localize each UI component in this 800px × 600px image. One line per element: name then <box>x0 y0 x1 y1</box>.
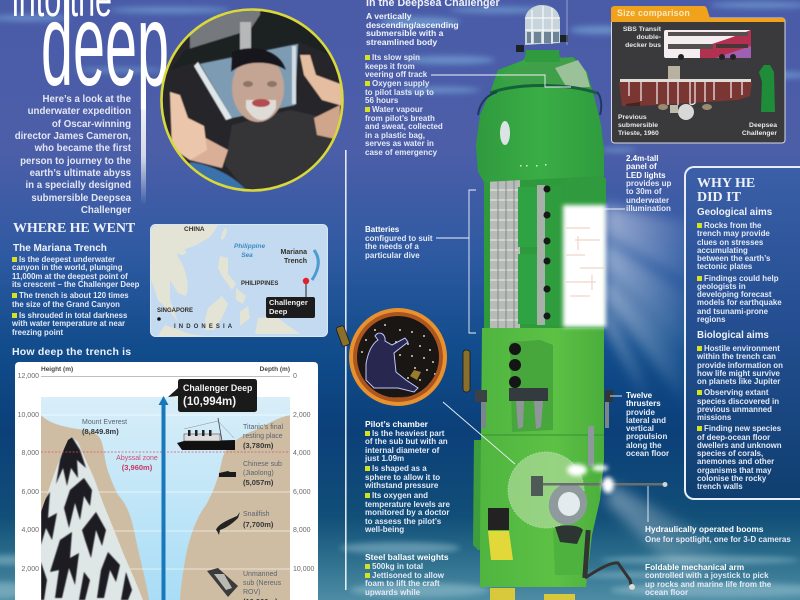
text: biological aims: species discovered in <box>697 396 779 406</box>
map label: Philippine Sea <box>234 243 265 258</box>
text: batteries: particular dive <box>365 250 420 260</box>
text: steel ballast weights <box>365 552 449 597</box>
label: Mount Everest: Mount Everest <box>82 419 127 426</box>
text: biological aims: of deep-ocean floor <box>697 432 770 442</box>
callout: Challenger Deep 10,994m: Challenger Deep <box>183 383 252 393</box>
bus icon <box>664 30 751 60</box>
text: pilot's chamber: well-being <box>365 525 404 534</box>
Nereus ROV icon <box>207 568 238 597</box>
map label: Indonesia: INDONESIA <box>174 324 235 330</box>
depth arrow <box>158 396 168 600</box>
lower hull <box>473 328 604 600</box>
label: bus: SBS Transit <box>623 26 661 33</box>
text: Mariana Trench facts: its crescent – the Challenger Deep The trench is about 120 times <box>12 280 139 300</box>
illustration: pilot's chamber cutaway <box>336 308 470 406</box>
heading: the Mariana Trench: The Mariana Trench <box>13 243 107 254</box>
map label: Singapore: SINGAPORE <box>157 308 193 314</box>
text: pilot's chamber: temperature levels are <box>365 500 450 508</box>
intro text: Here’s a look at the <box>43 94 131 105</box>
hydraulic boom and spotlight <box>508 452 668 590</box>
Titanic icon <box>177 418 235 450</box>
text: pilot's chamber: Is the heaviest part <box>372 428 444 438</box>
text: Mariana Trench facts: canyon in the world, plunging <box>12 263 122 272</box>
LED panel <box>563 178 606 327</box>
label: Deepsea Challenger <box>742 122 778 137</box>
text: foldable mechanical arm: controlled with a joystick to pick <box>645 571 769 580</box>
label: Snailfish: Snailfish <box>243 511 269 518</box>
text: sub description: streamlined body <box>366 37 437 47</box>
map callout: Challenger Deep: Deep <box>269 307 287 316</box>
title: into the deep <box>12 0 169 202</box>
text: Mariana Trench facts: the size of the Grand Canyon Is shrouded in total darkness <box>12 300 127 320</box>
text: biological aims: species of corals, <box>697 449 763 458</box>
label: Mount Everest <box>82 419 127 436</box>
text: sub description: descending/ascending <box>366 20 459 30</box>
intro text: submersible Deepsea <box>31 193 131 204</box>
text: sub facts: serves as water in <box>365 139 434 148</box>
text: Mariana Trench facts <box>12 255 140 337</box>
text: geological aims: geologists in <box>697 282 746 291</box>
viewing dome <box>516 5 568 62</box>
text: pilot's chamber: to assess the pilot’s <box>365 516 441 526</box>
chart left axis labels: 8,000 <box>21 450 39 457</box>
text: twelve thrusters: propulsion <box>626 432 667 441</box>
chart left axis labels: 2,000 <box>21 566 39 572</box>
heading: how deep the trench is: How deep the trench is <box>12 346 131 358</box>
text: foldable mechanical arm <box>645 562 771 597</box>
text: sub facts: 56 hours Water vapour <box>365 96 423 114</box>
chart: depth profile panel <box>15 362 318 600</box>
text: steel ballast weights: Jettisoned to allow <box>372 571 444 580</box>
chart right axis labels: 8,000 <box>293 527 311 534</box>
text: biological aims: on planets like Jupiter Observing extant <box>697 377 780 397</box>
callout: Challenger Deep 10,994m: (10,994m) <box>183 396 236 408</box>
text: LED lights: 2.4m-tall <box>626 154 658 163</box>
text: Mariana Trench facts: freezing point <box>12 328 63 337</box>
map label: Philippine Sea: Sea <box>241 252 253 258</box>
text: biological aims: how life might survive <box>697 369 780 378</box>
text: LED lights: underwater <box>626 196 669 205</box>
chart right axis labels: 10,000 <box>293 566 314 572</box>
chart left axis labels: 6,000 <box>21 488 39 496</box>
chart right axis labels: 0 <box>293 373 297 380</box>
label: Snailfish <box>243 510 273 529</box>
label: Trieste: Previous <box>618 114 647 121</box>
label: Unmanned sub <box>243 570 281 600</box>
text: geological aims: developing forecast <box>697 290 772 299</box>
intro text: who became the first <box>35 143 131 154</box>
text: LED lights: provides up <box>626 179 671 188</box>
heading: why he did it: WHY HE <box>697 176 755 191</box>
text: pilot's chamber: monitored by a doctor <box>365 508 449 517</box>
text: pilot's chamber: withstand pressure Its oxygen and <box>365 481 438 500</box>
text: twelve thrusters: thrusters <box>626 399 661 408</box>
text: pilot's chamber <box>364 419 450 534</box>
map label: Philippine Sea: Philippine <box>234 243 265 250</box>
text: geological aims: and tsunami-prone <box>697 306 768 316</box>
text: sub facts: to pilot lasts up to <box>365 88 434 96</box>
text: Mariana Trench facts: 11,000m at the deepest point of <box>12 272 128 281</box>
map callout: Challenger Deep: Challenger <box>269 298 308 307</box>
text: geological aims: accumulating <box>697 246 748 255</box>
intro text: person to journey to the <box>20 156 131 167</box>
text: sub facts: and sweat, collected <box>365 122 443 131</box>
panel: size comparison <box>611 6 786 144</box>
text: twelve thrusters: Twelve <box>626 391 652 400</box>
text: geological aims: trench may provide <box>697 229 770 238</box>
panel: why he did it <box>684 166 800 500</box>
text: pilot's chamber: internal diameter of <box>365 446 439 454</box>
text: twelve thrusters: along the <box>626 441 662 450</box>
chart axis title: depth: Depth (m) <box>260 366 290 373</box>
label: Abyssal zone: (3,960m) <box>122 463 152 472</box>
text: foldable mechanical arm: up rocks and marine life from the <box>645 580 771 589</box>
heading: geological aims: Geological aims <box>697 207 772 218</box>
text: sub description <box>366 11 459 47</box>
text: pilot's chamber: of the sub but with an <box>365 437 448 446</box>
label: Deepsea Challenger: Deepsea <box>749 122 777 129</box>
intro text: Challenger <box>81 205 131 216</box>
label: Snailfish: (7,700m) <box>243 520 273 529</box>
label: Titanic <box>243 424 283 450</box>
text: sub facts: in a plastic bag, <box>365 130 425 140</box>
text: biological aims: missions Finding new species <box>697 413 781 433</box>
text: twelve thrusters <box>626 391 669 458</box>
text: hydraulic booms: Hydraulically operated booms <box>645 524 764 534</box>
map label: Mariana Trench <box>280 248 308 265</box>
text: batteries <box>365 225 433 260</box>
text: LED lights: LED lights <box>626 171 666 180</box>
text: geological aims: between the earth’s <box>697 254 770 263</box>
intro text: of Oscar-winning <box>52 119 131 130</box>
text: biological aims: dwellers and unknown <box>697 441 782 450</box>
label: Trieste: submersible <box>618 122 658 129</box>
label: Titanic: Titanic’s final <box>243 424 283 431</box>
chart axis title: height: Height (m) <box>41 366 73 373</box>
text: sub facts: case of emergency <box>365 148 437 156</box>
chart left axis labels: 12,000 <box>18 373 39 380</box>
text: LED lights <box>626 154 672 213</box>
Trieste icon <box>619 66 752 120</box>
text: hydraulic booms <box>645 524 791 544</box>
label: Titanic: (3,780m) <box>243 441 273 450</box>
intro text: earth’s ultimate abyss <box>30 168 131 179</box>
chart right axis labels <box>293 373 314 572</box>
text: biological aims: anemones and other <box>697 457 774 466</box>
text: biological aims <box>697 344 783 491</box>
text: hydraulic booms: One for spotlight, one for 3-D cameras <box>645 534 791 544</box>
text: biological aims: colonise the rocky <box>697 474 766 483</box>
text: LED lights: to 30m of <box>626 187 662 196</box>
size comparison title: Size comparison <box>617 8 690 18</box>
callout arrow <box>168 379 257 412</box>
label: bus: decker bus <box>625 42 661 49</box>
Deepsea Challenger small icon <box>759 65 775 112</box>
text: batteries: Batteries <box>365 225 399 234</box>
text: sub facts <box>365 53 443 156</box>
heading: why he did it <box>697 176 755 205</box>
chart left axis labels <box>18 373 39 572</box>
text: sub facts: veering off track Oxygen supply <box>365 70 429 88</box>
text: biological aims: organisms that may <box>697 466 772 474</box>
text: geological aims: Rocks from the <box>704 221 761 230</box>
label: Trieste: Trieste, 1960 <box>618 130 659 137</box>
text: geological aims: tectonic plates Findings could help <box>697 262 779 282</box>
label: Mount Everest: (8,849.8m) <box>82 427 119 436</box>
label: Trieste <box>618 114 659 137</box>
text: steel ballast weights: foam to lift the craft <box>365 579 440 588</box>
text: biological aims: provide information on <box>697 360 783 370</box>
label: Unmanned sub: ROV) <box>243 589 260 596</box>
text: biological aims: within the trench can <box>697 352 776 361</box>
label: bus <box>623 26 661 49</box>
text: foldable mechanical arm: ocean floor <box>645 588 688 597</box>
heading: biological aims: Biological aims <box>697 330 769 341</box>
text: biological aims: trench walls <box>697 482 743 491</box>
label: Abyssal zone: Abyssal zone <box>116 455 158 462</box>
map label: Mariana Trench: Mariana <box>281 249 307 256</box>
snailfish icon <box>216 512 240 535</box>
intro text: director James Cameron, <box>15 131 131 142</box>
text: pilot's chamber: just 1.09m Is shaped as a <box>365 454 427 473</box>
water column <box>41 397 290 600</box>
text: biological aims: previous unmanned <box>697 405 772 414</box>
upper hull <box>476 50 604 182</box>
map label: Mariana Trench: Trench <box>284 258 307 265</box>
text: steel ballast weights: upwards while <box>365 588 420 597</box>
text: Mariana Trench facts: Is the deepest underwater <box>19 255 115 264</box>
text: twelve thrusters: ocean floor <box>626 449 669 458</box>
label: bus: double- <box>636 34 661 41</box>
text: biological aims: Hostile environment <box>704 344 780 353</box>
text: geological aims <box>697 221 782 324</box>
text: sub description: A vertically <box>366 11 412 21</box>
label: Unmanned sub: sub (Nereus <box>243 580 281 587</box>
map label: China: CHINA <box>184 226 205 233</box>
intro text: in a specially designed <box>25 180 131 191</box>
text: foldable mechanical arm: Foldable mechanical arm <box>645 562 744 572</box>
text: pilot's chamber: Pilot’s chamber <box>365 419 428 429</box>
heading: where he went: WHERE HE WENT <box>13 221 135 236</box>
label: Chinese sub: (Jiaolong) <box>243 470 274 477</box>
chart left axis labels: 10,000 <box>18 412 39 418</box>
text: steel ballast weights: Steel ballast weights <box>365 552 449 562</box>
callout: Challenger Deep 10,994m <box>183 383 252 408</box>
chart right axis labels: 2,000 <box>293 412 311 418</box>
map callout: Challenger Deep <box>269 298 308 316</box>
text: pilot's chamber: sphere to allow it to <box>365 472 440 482</box>
text: geological aims: regions <box>697 315 726 324</box>
map label: Philippines: PHILIPPINES <box>241 281 278 287</box>
text: steel ballast weights: 500kg in total <box>372 562 423 571</box>
thrusters <box>475 343 613 466</box>
label: Unmanned sub: Unmanned <box>243 571 277 578</box>
text: batteries: the needs of a <box>365 242 419 251</box>
label: Titanic: resting place <box>243 433 283 440</box>
text: batteries: configured to suit <box>365 234 433 242</box>
text: sub description: submersible with a <box>366 28 443 38</box>
text: sub facts: from pilot’s breath <box>365 114 435 122</box>
battery section <box>484 176 606 328</box>
photo: James Cameron in cockpit <box>160 8 344 192</box>
text: LED lights: illumination <box>626 204 671 213</box>
label: Chinese sub: Chinese sub <box>243 461 282 468</box>
text: twelve thrusters: provide <box>626 408 655 417</box>
chart right axis labels: 4,000 <box>293 450 311 457</box>
chart right axis labels: 6,000 <box>293 488 311 496</box>
text: LED lights: panel of <box>626 162 657 171</box>
text: sub facts: keeps it from <box>365 62 415 70</box>
text: Mariana Trench facts: with water temperature at near <box>12 319 125 328</box>
text: twelve thrusters: vertical <box>626 424 654 433</box>
text: sub facts: Its slow spin <box>372 53 420 62</box>
intro text <box>15 94 132 216</box>
Chinese sub icon <box>219 471 236 477</box>
mount everest <box>41 437 143 600</box>
text: geological aims: clues on stresses <box>697 238 763 246</box>
label: Chinese sub <box>243 460 282 487</box>
text: geological aims: models for earthquake <box>697 298 782 307</box>
chart left axis labels: 4,000 <box>21 527 39 534</box>
seabed terrain <box>41 415 290 600</box>
heading: why he did it: DID IT <box>697 190 741 205</box>
label: Deepsea Challenger: Challenger <box>742 130 777 137</box>
label: Chinese sub: (5,057m) <box>243 478 273 487</box>
text: twelve thrusters: lateral and <box>626 416 666 425</box>
intro text: underwater expedition <box>28 106 131 117</box>
label: Abyssal zone <box>116 454 158 472</box>
